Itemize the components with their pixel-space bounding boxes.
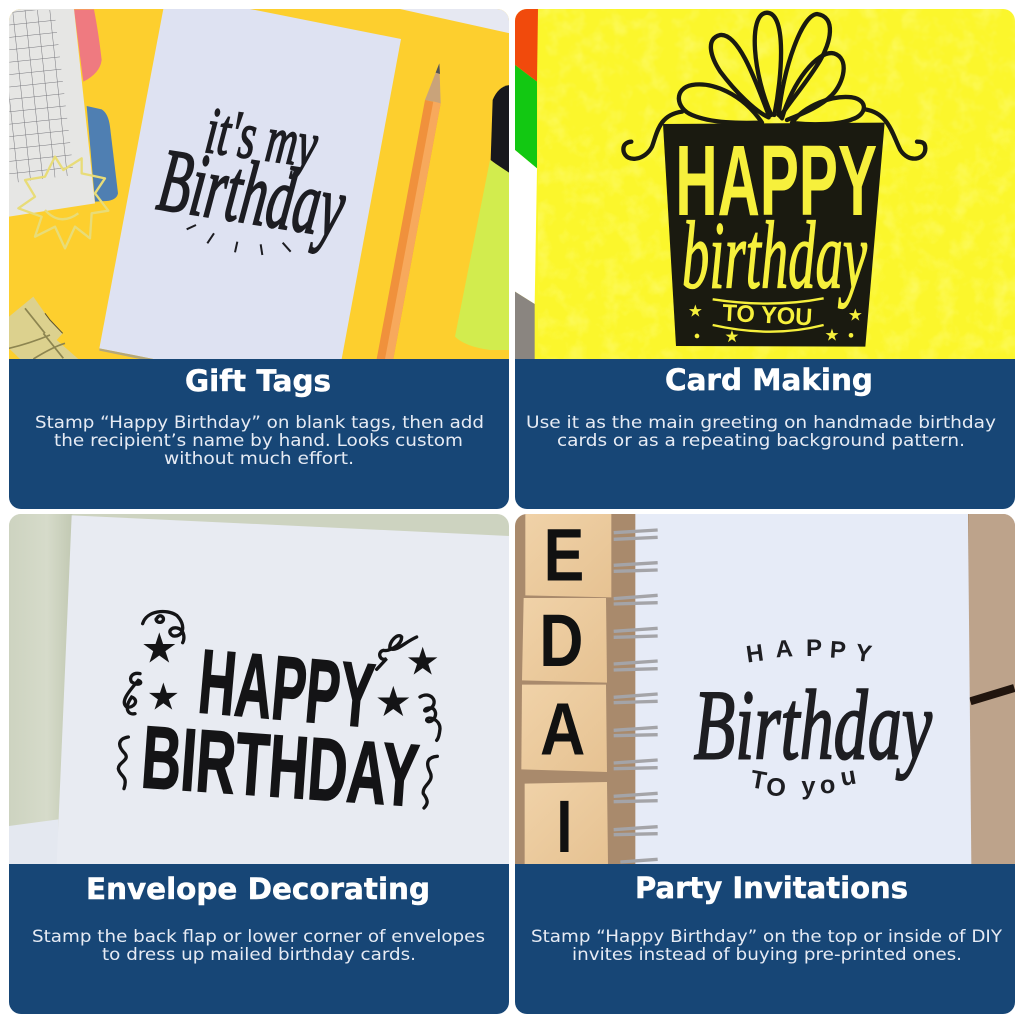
description: gift tags: Stamp “Happy Birthday” on blank tags, then add <box>35 413 484 433</box>
white card <box>57 515 510 864</box>
heading: Card Making: Card Making <box>665 363 873 397</box>
stars and dots <box>689 304 862 342</box>
description: party invitations: Stamp “Happy Birthday” on the top or inside of DIY <box>531 927 1003 947</box>
description: gift tags: without much effort. <box>164 449 354 469</box>
description: envelope decorating <box>32 927 485 965</box>
wood table right <box>969 514 1015 864</box>
pink tab <box>74 9 102 82</box>
lettering: HAPPY: HAPPY <box>744 635 873 669</box>
confetti stars: ★ <box>375 677 412 726</box>
lettering: it's my: it's my <box>201 94 322 182</box>
letter block A <box>521 685 607 772</box>
stars and dots: ★ <box>725 327 739 346</box>
lettering: to you: TO you <box>748 762 858 803</box>
heading: Gift Tags: Gift Tags <box>185 364 331 398</box>
description: card making: Use it as the main greeting on handmade birthday <box>526 413 996 433</box>
photo: birthday card on yellow desk <box>9 9 510 359</box>
coloured strips at left edge <box>515 9 538 359</box>
notebook page <box>635 514 971 864</box>
letter block E <box>525 513 611 597</box>
lettering: TO YOU: TO YOU <box>722 300 813 331</box>
description: party invitations <box>531 927 1003 965</box>
grid note paper <box>9 9 95 217</box>
panel: card making <box>515 9 1015 509</box>
caption panel background <box>9 359 509 509</box>
photo: yellow card with gift box <box>515 9 1015 359</box>
top right paper <box>400 9 510 33</box>
card shadow edge <box>99 348 153 359</box>
note grid <box>9 10 74 183</box>
description: envelope decorating: to dress up mailed birthday cards. <box>102 945 416 965</box>
caption panel background <box>515 864 1015 1014</box>
box lettering <box>679 146 876 342</box>
photo: spiral notebook and wooden blocks <box>515 513 1015 868</box>
lettering: HAPPY: HAPPY <box>675 125 877 237</box>
gift box <box>663 123 885 347</box>
lettering: Birthday: Birthday <box>152 130 352 257</box>
icon: gift bow <box>623 13 925 159</box>
caption panel background <box>9 864 509 1014</box>
swooshes <box>713 298 824 332</box>
description: gift tags <box>36 415 482 464</box>
confetti squiggles <box>118 612 440 808</box>
description: card making <box>526 413 996 451</box>
icon: sun paperclip <box>18 157 108 248</box>
rays <box>187 225 291 255</box>
wood crack <box>970 688 1014 701</box>
lettering: HAPPY: HAPPY <box>195 631 378 747</box>
photo: white card on sage background <box>9 514 510 864</box>
card lettering <box>118 612 440 825</box>
confetti stars: ★ <box>405 640 440 685</box>
confetti stars: ★ <box>141 624 178 673</box>
description: gift tags: the recipient’s name by hand. Looks custom <box>54 431 463 451</box>
white table corner <box>9 819 58 864</box>
panel: gift tags <box>9 9 510 509</box>
stars and dots: ★ <box>825 326 839 345</box>
confetti stars <box>141 624 440 726</box>
description: card making: cards or as a repeating background pattern. <box>557 431 965 451</box>
notebook lettering <box>694 635 932 803</box>
caption panel background <box>515 359 1015 509</box>
binder clips <box>9 297 78 359</box>
pencil <box>377 63 441 359</box>
lettering: BIRTHDAY: BIRTHDAY <box>139 707 422 825</box>
heading: Party Invitations: Party Invitations <box>635 871 908 905</box>
greeting card <box>99 9 401 359</box>
letter block I <box>525 782 608 868</box>
letter block D: D <box>539 599 583 682</box>
panel: envelope decorating <box>9 514 510 1014</box>
highlighter marker <box>455 85 510 350</box>
letter block D <box>522 598 607 683</box>
panel: party invitations <box>515 513 1015 1014</box>
spiral binding <box>614 530 658 862</box>
confetti stars: ★ <box>147 674 180 718</box>
letter block E: E <box>544 513 584 596</box>
blue tab <box>87 106 118 202</box>
description: envelope decorating: Stamp the back flap or lower corner of envelopes <box>32 927 485 947</box>
card lettering <box>154 108 346 256</box>
stars and dots: ★ <box>688 302 703 321</box>
description: party invitations: invites instead of buying pre-printed ones. <box>572 945 962 965</box>
letter block A: A <box>540 688 585 771</box>
heading: Envelope Decorating: Envelope Decorating <box>86 872 430 906</box>
lettering: birthday: birthday <box>682 201 867 308</box>
letter block I: I <box>556 785 572 868</box>
stars and dots: ★ <box>848 306 863 325</box>
